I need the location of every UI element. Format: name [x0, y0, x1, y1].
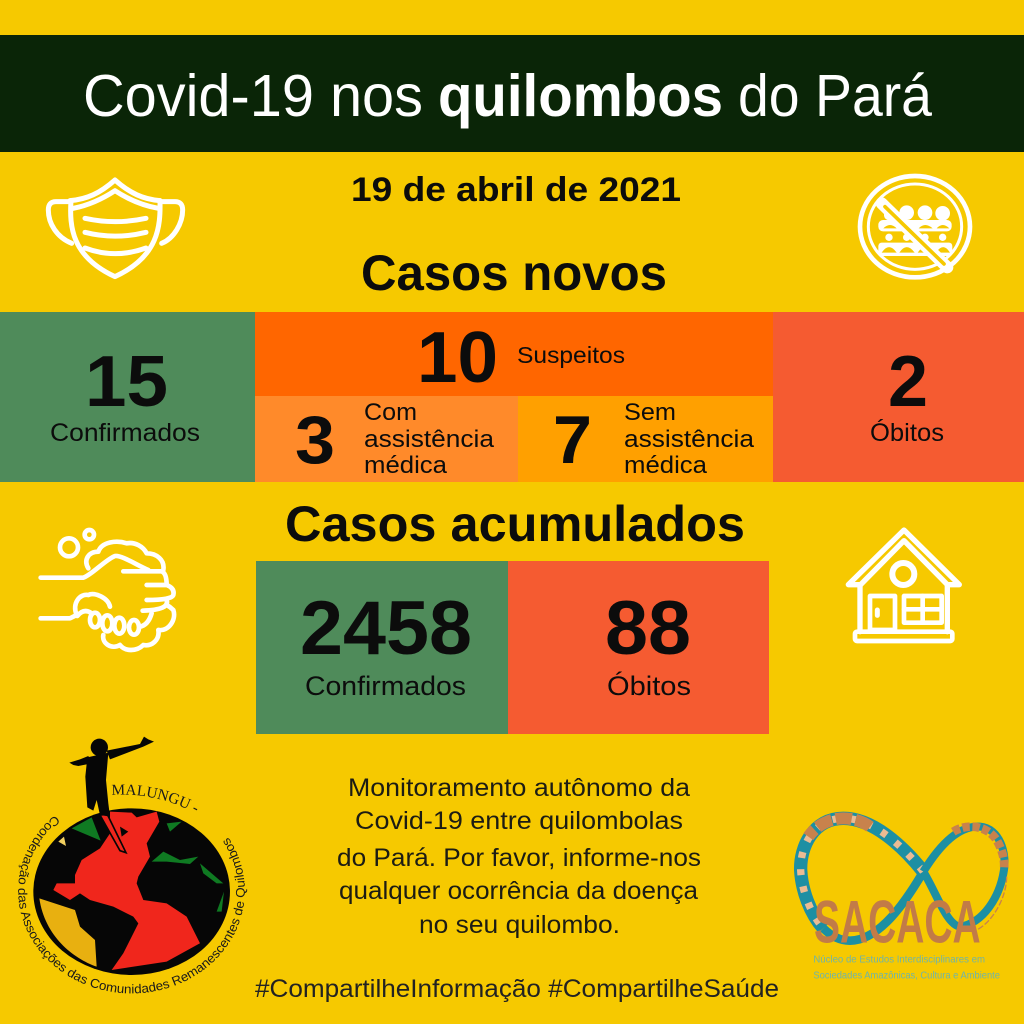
header banner: do Pará: [738, 63, 932, 129]
panel: sem assistência médica: assistência: [624, 426, 755, 453]
panel: confirmados acumulados: Confirmados: [305, 671, 466, 701]
panel: com assistência médica: médica: [364, 452, 448, 479]
logo: SACACA: Sociedades Amazônicas, Cultura e Ambiente: [813, 971, 1000, 982]
icon: face mask: [48, 180, 183, 277]
text block: monitoramento: no seu quilombo.: [419, 911, 620, 939]
text block: monitoramento: Monitoramento autônomo da: [348, 774, 690, 802]
panel: suspeitos: [255, 312, 773, 398]
panel: óbitos novos: 2: [888, 342, 928, 422]
logo: SACACA: Núcleo de Estudos Interdisciplinares em: [813, 955, 985, 966]
panel: com assistência médica: 3: [295, 402, 335, 478]
panel: confirmados novos: Confirmados: [50, 419, 200, 447]
heading: casos acumulados: Casos acumulados: [285, 496, 745, 552]
panel: com assistência médica: assistência: [364, 426, 495, 453]
logo: Malungu globe: MALUNGU -: [112, 784, 198, 810]
text block: monitoramento: qualquer ocorrência da doença: [339, 877, 698, 905]
text block: monitoramento: do Pará. Por favor, informe-nos: [337, 844, 701, 872]
panel: sem assistência médica: Sem: [624, 399, 676, 426]
panel: óbitos acumulados: Óbitos: [607, 670, 691, 701]
logo: Malungu globe: [18, 736, 248, 994]
panel: sem assistência médica: 7: [553, 402, 592, 478]
panel: óbitos acumulados: [508, 561, 769, 734]
panel: sem assistência médica: médica: [624, 452, 708, 479]
header banner: quilombos: [438, 63, 723, 129]
panel: suspeitos: 10: [417, 318, 498, 398]
icon: no crowds: [860, 176, 970, 277]
panel: sem assistência médica: [518, 396, 773, 482]
heading: casos novos: Casos novos: [361, 245, 667, 301]
panel: confirmados acumulados: 2458: [300, 586, 472, 671]
text block: monitoramento: Covid-19 entre quilombolas: [355, 807, 683, 835]
hashtags: #CompartilheInformação #CompartilheSaúde: [255, 975, 779, 1003]
header banner: [0, 35, 1024, 152]
panel: confirmados novos: 15: [85, 342, 168, 422]
panel: óbitos novos: [773, 312, 1024, 482]
date: 19 de abril de 2021: [351, 171, 681, 209]
logo: Malungu globe: Coordenação das Associações das Comunidades Remanescentes de Quilombos: [18, 816, 248, 994]
icon: washing hands: [41, 530, 174, 650]
panel: com assistência médica: [255, 396, 518, 482]
header banner: Covid-19 nos: [83, 63, 423, 129]
panel: confirmados novos: [0, 312, 255, 482]
panel: óbitos acumulados: 88: [605, 586, 691, 671]
panel: confirmados acumulados: [256, 561, 508, 734]
panel: com assistência médica: Com: [364, 399, 417, 426]
panel: óbitos novos: Óbitos: [870, 418, 944, 447]
panel: suspeitos: Suspeitos: [517, 342, 625, 368]
icon: house: [848, 530, 959, 641]
text block: monitoramento: [337, 774, 701, 939]
logo: SACACA: [801, 818, 1007, 982]
